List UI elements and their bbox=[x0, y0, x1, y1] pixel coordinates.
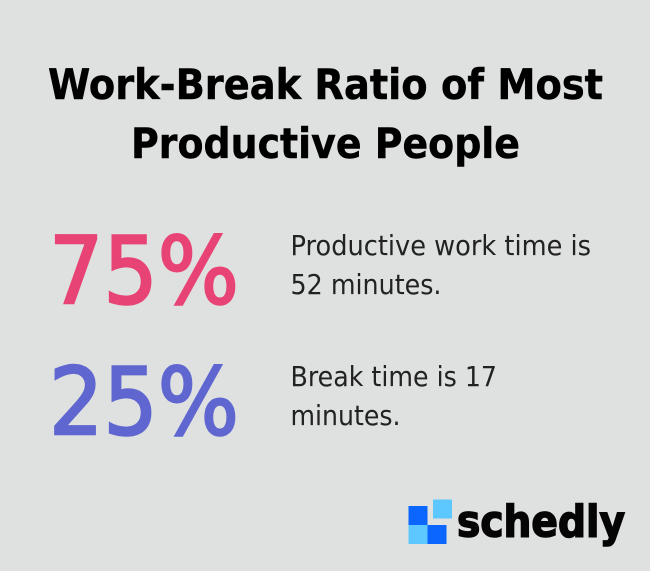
text: break time: Break time is 17 bbox=[290, 361, 497, 393]
text: break time bbox=[290, 361, 497, 432]
logo wordmark: schedly bbox=[457, 496, 625, 548]
logo: schedly bbox=[408, 496, 625, 548]
text: productive work time: 52 minutes. bbox=[290, 269, 442, 301]
text: break time: minutes. bbox=[290, 400, 400, 432]
text: productive work time bbox=[290, 230, 591, 301]
stat: 25 percent: 25% bbox=[49, 348, 239, 456]
title bbox=[48, 60, 603, 168]
icon: logo squares bbox=[408, 500, 452, 544]
title: Productive People bbox=[131, 119, 520, 168]
title: Work-Break Ratio of Most bbox=[48, 60, 603, 109]
stat: 75 percent: 75% bbox=[49, 217, 239, 325]
text: productive work time: Productive work time is bbox=[290, 230, 591, 262]
